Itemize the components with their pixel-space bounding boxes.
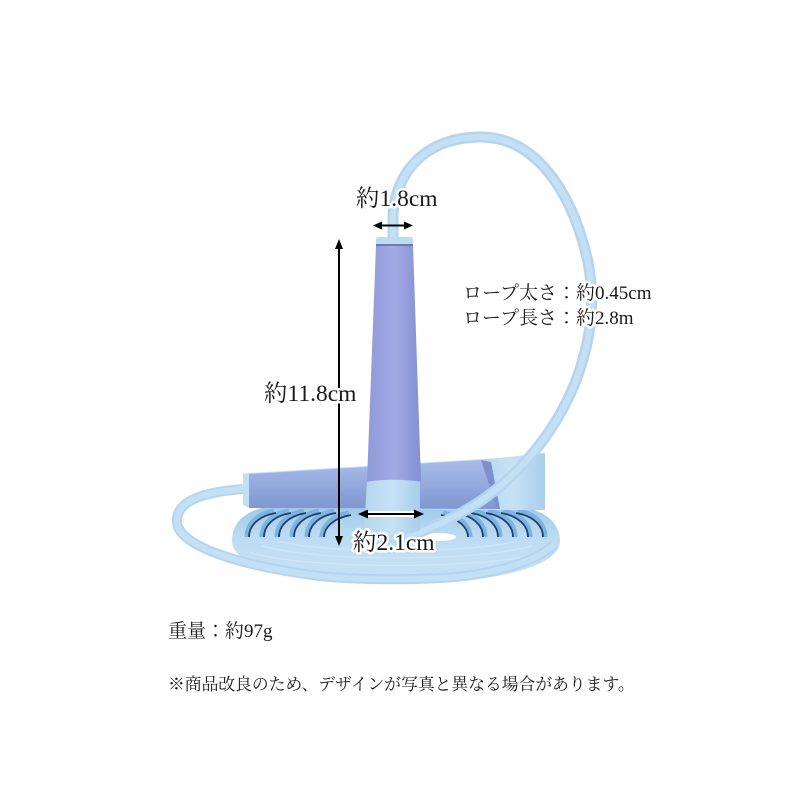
centre gap of coil: [420, 533, 456, 541]
upper rope: [393, 137, 592, 538]
disclaimer note: ※商品改良のため、デザインが写真と異なる場合があります。: [168, 675, 635, 694]
dimension arrow: base width: [358, 510, 424, 518]
vertical handle: [364, 237, 421, 535]
outer rope loop: [177, 489, 554, 579]
rope specifications: ロープ太さ：約0.45cm: [463, 282, 652, 304]
rope specifications: ロープ長さ：約2.8m: [463, 307, 634, 329]
label: handle length: 約11.8cm: [264, 380, 356, 407]
weight: 重量：約97g: [168, 620, 273, 642]
label: top width: 約1.8cm: [356, 185, 438, 212]
dimension arrow: top width: [373, 222, 413, 230]
horizontal handle: [243, 453, 545, 510]
dimension arrow: height: [335, 239, 343, 546]
rope coil: [232, 505, 560, 584]
rope specifications: [463, 282, 652, 329]
label: base width: 約2.1cm: [353, 529, 435, 556]
